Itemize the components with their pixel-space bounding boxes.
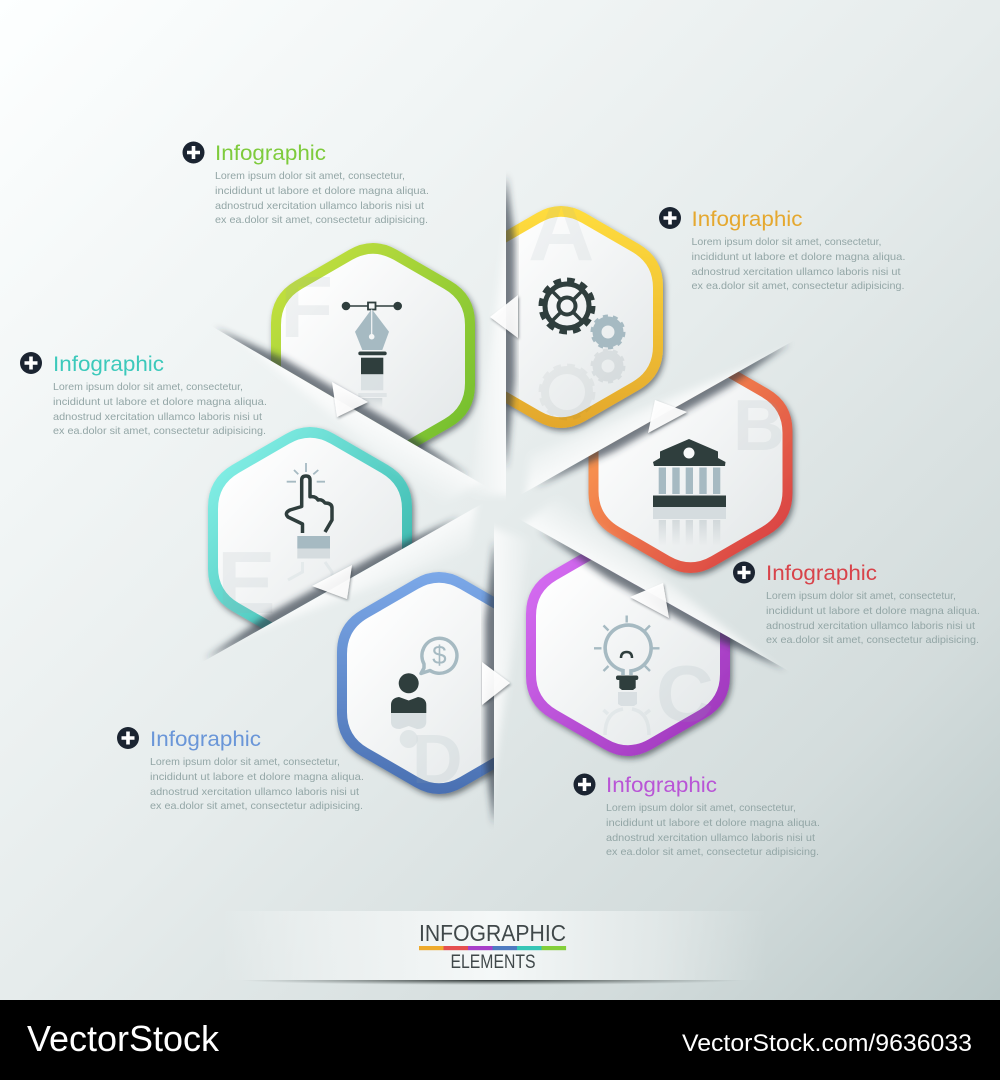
body A: adnostrud xercitation ullamco laboris nisi ut: [692, 266, 901, 278]
body F: adnostrud xercitation ullamco laboris nisi ut: [215, 200, 424, 212]
text block: D: [117, 727, 364, 812]
body E: [53, 381, 267, 437]
plus icon D: [117, 727, 139, 749]
body D: Lorem ipsum dolor sit amet, consectetur,: [150, 756, 340, 768]
body F: incididunt ut labore et dolore magna aliqua.: [215, 185, 429, 197]
body D: adnostrud xercitation ullamco laboris nisi ut: [150, 786, 359, 798]
body E: ex ea.dolor sit amet, consectetur adipisicing.: [53, 425, 266, 437]
icon: gears: [541, 280, 623, 418]
colour bar: [419, 946, 566, 950]
fold highlight: above edge C: [524, 510, 764, 656]
fold shadow: below edge B: [535, 343, 790, 487]
banner title: INFOGRAPHIC: [419, 920, 566, 946]
body A: [692, 236, 906, 292]
heading F: Infographic: [215, 142, 326, 165]
icon: light bulb: [594, 616, 660, 735]
arrow: C to B: [630, 583, 669, 618]
heading D: Infographic: [150, 728, 261, 751]
letter A: A: [528, 178, 594, 280]
fold shadow: above edge F: [215, 328, 470, 477]
body C: incididunt ut labore et dolore magna aliqua.: [606, 817, 820, 829]
banner panel: [222, 911, 767, 980]
banner: infographic elements: [222, 911, 767, 990]
body B: ex ea.dolor sit amet, consectetur adipisicing.: [766, 634, 979, 646]
panel: hexagon C: [526, 534, 730, 756]
panel: hexagon F: [271, 243, 475, 465]
letter B: B: [733, 386, 785, 466]
text block: F: [182, 142, 429, 226]
footer url: VectorStock.com/9636033: [682, 1030, 972, 1057]
text block: A: [659, 207, 906, 292]
footer bar: [0, 1000, 1000, 1080]
body B: incididunt ut labore et dolore magna aliqua.: [766, 605, 980, 617]
fold shadow: left of vertical edge D: [481, 542, 494, 824]
arrow: B to A: [648, 400, 687, 433]
body F: Lorem ipsum dolor sit amet, consectetur,: [215, 170, 405, 182]
arrow: E to D: [312, 565, 352, 599]
fold shadow: above edge E: [205, 517, 460, 659]
body D: [150, 756, 364, 812]
icon: person with dollar bubble: [391, 638, 457, 748]
body F: [215, 170, 429, 226]
plus icon E: [20, 352, 42, 374]
body E: adnostrud xercitation ullamco laboris nisi ut: [53, 411, 262, 423]
icon: pointing hand: [286, 463, 332, 585]
arrow: D to C: [482, 662, 510, 705]
text block: B: [733, 562, 980, 646]
body D: incididunt ut labore et dolore magna aliqua.: [150, 771, 364, 783]
fold shadow: below edge C: [538, 530, 785, 669]
banner shadow: [240, 980, 744, 990]
heading E: Infographic: [53, 353, 164, 376]
arrow: F to E: [332, 382, 368, 417]
panel: hexagon E: [208, 427, 412, 649]
letter C: C: [656, 649, 714, 738]
heading C: Infographic: [606, 774, 717, 797]
icon: person with dollar bubble: $: [432, 640, 447, 670]
banner subtitle: ELEMENTS: [450, 952, 536, 973]
body E: incididunt ut labore et dolore magna aliqua.: [53, 396, 267, 408]
icon: bank: [653, 439, 726, 546]
text block: C: [574, 774, 820, 858]
body C: Lorem ipsum dolor sit amet, consectetur,: [606, 802, 796, 814]
body C: adnostrud xercitation ullamco laboris nisi ut: [606, 832, 815, 844]
body F: ex ea.dolor sit amet, consectetur adipisicing.: [215, 214, 428, 226]
fold highlight: right of edge D: [494, 528, 518, 780]
body C: ex ea.dolor sit amet, consectetur adipisicing.: [606, 846, 819, 858]
panel: hexagon A: [506, 205, 669, 435]
letter E: E: [217, 533, 276, 632]
fold highlight: below edge F: [264, 357, 478, 490]
body A: Lorem ipsum dolor sit amet, consectetur,: [692, 236, 882, 248]
plus icon F: [182, 142, 204, 164]
body A: ex ea.dolor sit amet, consectetur adipisicing.: [692, 280, 904, 292]
body B: adnostrud xercitation ullamco laboris nisi ut: [766, 620, 975, 632]
text block: E: [20, 352, 267, 437]
body A: incididunt ut labore et dolore magna aliqua.: [692, 251, 906, 263]
plus icon C: [574, 774, 596, 796]
body D: ex ea.dolor sit amet, consectetur adipisicing.: [150, 800, 363, 812]
heading A: Infographic: [692, 208, 802, 231]
body B: Lorem ipsum dolor sit amet, consectetur,: [766, 590, 956, 602]
fold highlight: above edge B: [526, 364, 752, 492]
icon: pen tool: [342, 302, 402, 408]
fold highlight: left of edge A: [484, 246, 506, 496]
arrow: A to F: [490, 295, 518, 338]
body B: [766, 590, 980, 646]
plus icon A: [659, 207, 681, 229]
letter F: F: [280, 259, 333, 356]
fold highlight: below edge E: [262, 508, 476, 629]
fold shadow: right of vertical edge A: [506, 176, 519, 468]
body E: Lorem ipsum dolor sit amet, consectetur,: [53, 381, 243, 393]
body C: [606, 802, 820, 858]
plus icon B: [733, 562, 755, 584]
letter D: D: [412, 720, 463, 798]
panel: hexagon B: [588, 351, 792, 573]
heading B: Infographic: [766, 562, 877, 585]
panel: hexagon D: [335, 571, 494, 801]
footer logo: VectorStock: [27, 1018, 220, 1059]
